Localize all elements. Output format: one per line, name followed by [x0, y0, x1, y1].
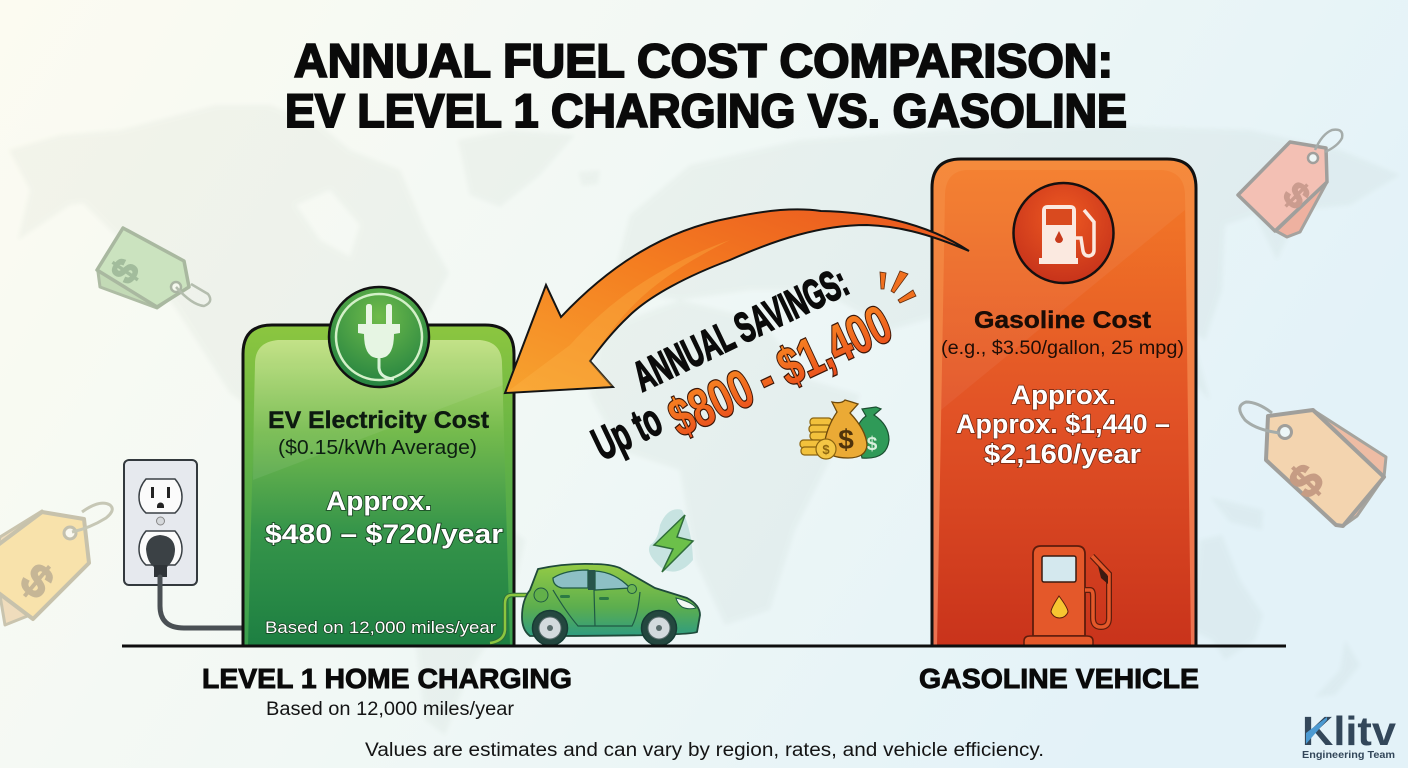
EV annual cost: $480 – $720/year [265, 519, 504, 549]
gasoline annual cost: $2,160/year [984, 439, 1142, 469]
icon: electric car [490, 564, 700, 646]
title: ANNUAL FUEL COST COMPARISON: [294, 34, 1113, 87]
gasoline annual cost: Approx. $1,440 – [956, 409, 1170, 439]
price tag: green [97, 228, 210, 308]
label: level 1 home charging: LEVEL 1 HOME CHARGING [202, 663, 572, 694]
price tag: red [1238, 130, 1342, 237]
burst lines [880, 271, 916, 303]
gasoline cost heading: Gasoline Cost [974, 307, 1151, 334]
label: gasoline vehicle: GASOLINE VEHICLE [919, 663, 1199, 694]
wall outlet with plug [124, 460, 197, 585]
gasoline annual cost [956, 380, 1170, 469]
price tag: orange: $ [1278, 453, 1333, 508]
EV cost heading: EV Electricity Cost [268, 407, 489, 434]
icon: money bags and coins: $ [822, 442, 830, 457]
callout up to: Up to [584, 393, 669, 470]
price tag: green: $ [102, 251, 147, 291]
car body [522, 564, 700, 636]
icon: lightning bolt [649, 509, 693, 572]
panel: EV electricity cost [243, 287, 514, 646]
logo: Klitv Engineering Team: Klitv [1302, 708, 1396, 754]
footnote: Values are estimates and can vary by region, rates, and vehicle efficiency. [365, 740, 1044, 761]
EV rate note: ($0.15/kWh Average) [278, 437, 477, 459]
gasoline annual cost: Approx. [1011, 380, 1116, 410]
panel inner highlight [937, 170, 1191, 646]
EV miles note: Based on 12,000 miles/year [265, 618, 496, 637]
price tag: yellow [0, 503, 112, 625]
title: EV LEVEL 1 CHARGING VS. GASOLINE [285, 84, 1127, 137]
arrow: savings from gasoline to EV [505, 209, 969, 393]
icon: plug badge [329, 287, 429, 387]
icon: fuel pump illustration [1024, 546, 1109, 646]
price tag: yellow: $ [11, 553, 64, 609]
icon: money bags and coins [800, 400, 889, 459]
icon: money bags and coins: $ [838, 424, 854, 455]
charging cable [490, 595, 532, 643]
icon: money bags and coins: $ [867, 434, 878, 455]
panel: gasoline cost [932, 159, 1196, 646]
gasoline price note: (e.g., $3.50/gallon, 25 mpg) [941, 338, 1184, 359]
callout heading: ANNUAL SAVINGS: [626, 258, 855, 400]
callout savings amount: $800 - $1,400 [660, 294, 901, 449]
EV annual cost [265, 486, 504, 549]
ground line [122, 644, 1286, 648]
panel inner highlight [248, 340, 510, 646]
panel body [243, 325, 514, 646]
icon: fuel pump badge [1014, 183, 1114, 283]
EV annual cost: Approx. [326, 486, 432, 516]
price tag: red: $ [1275, 174, 1318, 217]
panel body [932, 159, 1196, 646]
price tag: orange [1240, 402, 1386, 526]
logo: Klitv Engineering Team: Engineering Team [1302, 749, 1395, 761]
callout: annual savings [584, 258, 916, 470]
title [285, 34, 1127, 137]
label: miles basis: Based on 12,000 miles/year [266, 699, 515, 720]
power cord [160, 577, 243, 628]
